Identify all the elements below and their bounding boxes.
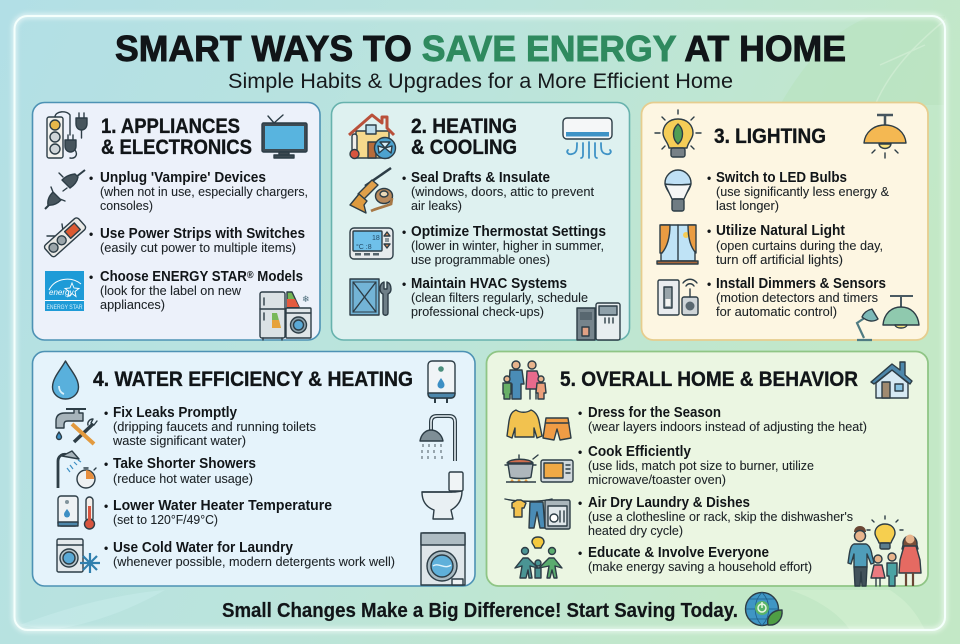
bullet: seal drafts: [402, 170, 594, 213]
icon: ceiling lamp: [864, 115, 906, 158]
bullet: unplug: •: [89, 171, 93, 185]
panel: lighting: [642, 102, 928, 340]
icon: fridge and washer: [260, 292, 311, 340]
bullet: unplug: (when not in use, especially chargers,: [100, 184, 308, 199]
bullet: dimmers: Install Dimmers & Sensors: [716, 276, 886, 292]
icon: house with thermometer and fan: [349, 115, 396, 158]
bullet: educate: •: [578, 546, 582, 560]
bullet: unplug: [89, 170, 308, 213]
icon: clothesline and dishwasher: [505, 499, 570, 529]
bullet: power strips: •: [89, 227, 93, 241]
bullet: natural light: [707, 223, 883, 267]
bullet: dress: [578, 405, 867, 434]
bullet: seal drafts: •: [402, 171, 406, 185]
bullet: hvac: Maintain HVAC Systems: [411, 276, 567, 292]
icon: house: [871, 362, 912, 398]
bullet: power strips: (easily cut power to multiple items): [100, 240, 296, 255]
icon: heater and thermometer: [58, 496, 94, 529]
bullet: natural light: Utilize Natural Light: [716, 223, 845, 239]
bullet: air dry: Air Dry Laundry & Dishes: [588, 495, 750, 511]
panel: water efficiency and heating: [32, 352, 475, 586]
icon: air conditioner: [563, 118, 612, 158]
heading line 2: & COOLING: [411, 136, 517, 159]
bullet: thermostat: Optimize Thermostat Settings: [411, 224, 606, 240]
bullet: dimmers: [707, 276, 886, 319]
bullet: air dry: (use a clothesline or rack, skip the dishwasher's: [588, 509, 853, 524]
bullet: seal drafts: (windows, doors, attic to prevent: [411, 184, 594, 199]
icon: faucet and tools: [56, 409, 97, 444]
heading: water: 4. WATER EFFICIENCY & HEATING: [93, 368, 413, 391]
bullet: dress: (wear layers indoors instead of adjusting the heat): [588, 419, 867, 434]
bullet: energy star: Choose ENERGY STAR: [100, 269, 261, 285]
icon: thermostat: [350, 228, 393, 259]
bullet: LED: •: [707, 171, 711, 185]
bullet: unplug: consoles): [100, 198, 153, 213]
bullet: cook: (use lids, match pot size to burner, utilize: [588, 458, 814, 473]
icon: water heater: [428, 361, 455, 403]
bullet: educate: (make energy saving a household effort): [588, 559, 812, 574]
icon: washer and snowflake: [57, 539, 100, 573]
bullet: heater: (set to 120°F/49°C): [113, 512, 218, 527]
icon: thermostat: °C :8: [356, 243, 372, 251]
footer message: Small Changes Make a Big Difference! Start Saving Today.: [222, 600, 738, 622]
bullet: hvac: (clean filters regularly, schedule: [411, 290, 588, 305]
bullet: air dry: [578, 495, 853, 538]
bullet: educate: [578, 545, 812, 574]
bullet: energy star: ®: [247, 270, 254, 281]
bullet: hvac: professional check-ups): [411, 304, 544, 319]
bullet: heater: [104, 498, 332, 527]
heading: appliances: 1. APPLIANCES: [101, 115, 240, 138]
icon: fridge and washer: ❄: [302, 294, 310, 304]
icon: energy star label: [45, 271, 84, 311]
title: SMART WAYS TO SAVE ENERGY AT HOME: [115, 28, 846, 69]
bullet: laundry: (whenever possible, modern detergents work well): [113, 554, 395, 569]
bullet: air dry: heated dry cycle): [588, 523, 683, 538]
icon: globe with power symbol: [746, 592, 782, 626]
icon: thermostat: 18: [372, 235, 380, 242]
icon: water drop: [52, 361, 78, 399]
bullet: hvac: [402, 276, 588, 319]
icon: washing machine: [421, 533, 465, 585]
icon: family: [503, 361, 546, 399]
bullet: energy star: •: [89, 270, 93, 284]
bullet: thermostat: [402, 224, 606, 267]
bullet: energy star: appliances): [100, 297, 165, 312]
bullet: dress: Dress for the Season: [588, 405, 721, 421]
subtitle: Simple Habits & Upgrades for a More Efficient Home: [228, 70, 733, 93]
bullet: unplug: Unplug 'Vampire' Devices: [100, 170, 266, 186]
icon: toilet: [422, 472, 463, 519]
icon: dimmer switch and sensor: [658, 279, 698, 315]
icon: shower head: [420, 416, 455, 461]
bullet: natural light: (open curtains during the day,: [716, 238, 883, 253]
bullet: hvac: •: [402, 277, 406, 291]
bullet: showers: [104, 456, 256, 486]
heading: behavior: 5. OVERALL HOME & BEHAVIOR: [560, 368, 858, 391]
bullet: cook: microwave/toaster oven): [588, 472, 726, 487]
icon: power strip with switch: [43, 217, 87, 258]
bullet: natural light: •: [707, 224, 711, 238]
icon: window with curtains: [657, 225, 698, 264]
bullet: leaks: •: [104, 406, 108, 420]
icon: desk lamp and pendant lamp: [857, 296, 919, 340]
icon: energy star label: energy: [49, 288, 74, 297]
heading: heating: 2. HEATING: [411, 115, 517, 138]
icon: unplugged cord: [45, 170, 85, 209]
bullet: air dry: •: [578, 496, 582, 510]
icon: family with light bulb: [848, 516, 921, 586]
bullet: showers: Take Shorter Showers: [113, 456, 256, 472]
bullet: dimmers: (motion detectors and timers: [716, 290, 878, 305]
icon: furnace and portable cooler: [577, 303, 620, 340]
bullet: energy star: (look for the label on new: [100, 283, 242, 298]
icon: pot and microwave: [505, 455, 573, 482]
bullet: energy star: [89, 269, 303, 312]
bullet: LED: Switch to LED Bulbs: [716, 170, 847, 186]
bullet: LED: last longer): [716, 198, 779, 213]
bullet: dress: •: [578, 406, 582, 420]
icon: caulk gun and tape: [350, 168, 392, 213]
heading: lighting: 3. LIGHTING: [714, 125, 826, 148]
icon: sweater and shorts: [507, 410, 571, 440]
bullet: cook: Cook Efficiently: [588, 444, 691, 460]
bullet: leaks: (dripping faucets and running toilets: [113, 419, 316, 434]
bullet: cook: •: [578, 445, 582, 459]
icon: power strip and plug: [47, 112, 87, 158]
bullet: laundry: Use Cold Water for Laundry: [113, 540, 293, 556]
heading line 2: & ELECTRONICS: [101, 136, 252, 159]
bullet: heater: Lower Water Heater Temperature: [113, 498, 332, 514]
bullet: natural light: turn off artificial lights): [716, 252, 843, 267]
icon: people with idea: [515, 537, 562, 578]
bullet: educate: Educate & Involve Everyone: [588, 545, 769, 561]
bullet: laundry: •: [104, 541, 108, 555]
icon: bulb with leaf: [655, 110, 701, 157]
bullet: showers: •: [104, 457, 108, 471]
panel: overall home and behavior: [486, 352, 928, 586]
bullet: showers: (reduce hot water usage): [113, 471, 253, 486]
bullet: leaks: Fix Leaks Promptly: [113, 405, 237, 421]
bullet: thermostat: use programmable ones): [411, 252, 550, 267]
icon: energy star label: ENERGY STAR: [46, 304, 83, 311]
bullet: dimmers: •: [707, 277, 711, 291]
bullet: thermostat: •: [402, 225, 406, 239]
bullet: cook: [578, 444, 814, 487]
bullet: heater: •: [104, 499, 108, 513]
bullet: LED: [707, 170, 889, 213]
icon: shower and timer: [58, 451, 96, 488]
bullet: energy star: Models: [254, 269, 303, 285]
bullet: laundry: [104, 540, 395, 569]
bullet: seal drafts: air leaks): [411, 198, 462, 213]
panel: appliances and electronics: [32, 102, 320, 340]
bullet: thermostat: (lower in winter, higher in summer,: [411, 238, 604, 253]
panel: heating and cooling: [332, 102, 630, 340]
bullet: leaks: [104, 405, 316, 448]
icon: LED bulb: [665, 170, 691, 211]
icon: television: [262, 115, 307, 158]
bullet: power strips: [89, 226, 305, 255]
bullet: LED: (use significantly less energy &: [716, 184, 889, 199]
icon: air filter and wrench: [350, 279, 391, 315]
bullet: dimmers: for automatic control): [716, 304, 837, 319]
bullet: power strips: Use Power Strips with Switches: [100, 226, 305, 242]
bullet: leaks: waste significant water): [112, 433, 246, 448]
bullet: seal drafts: Seal Drafts & Insulate: [411, 170, 550, 186]
